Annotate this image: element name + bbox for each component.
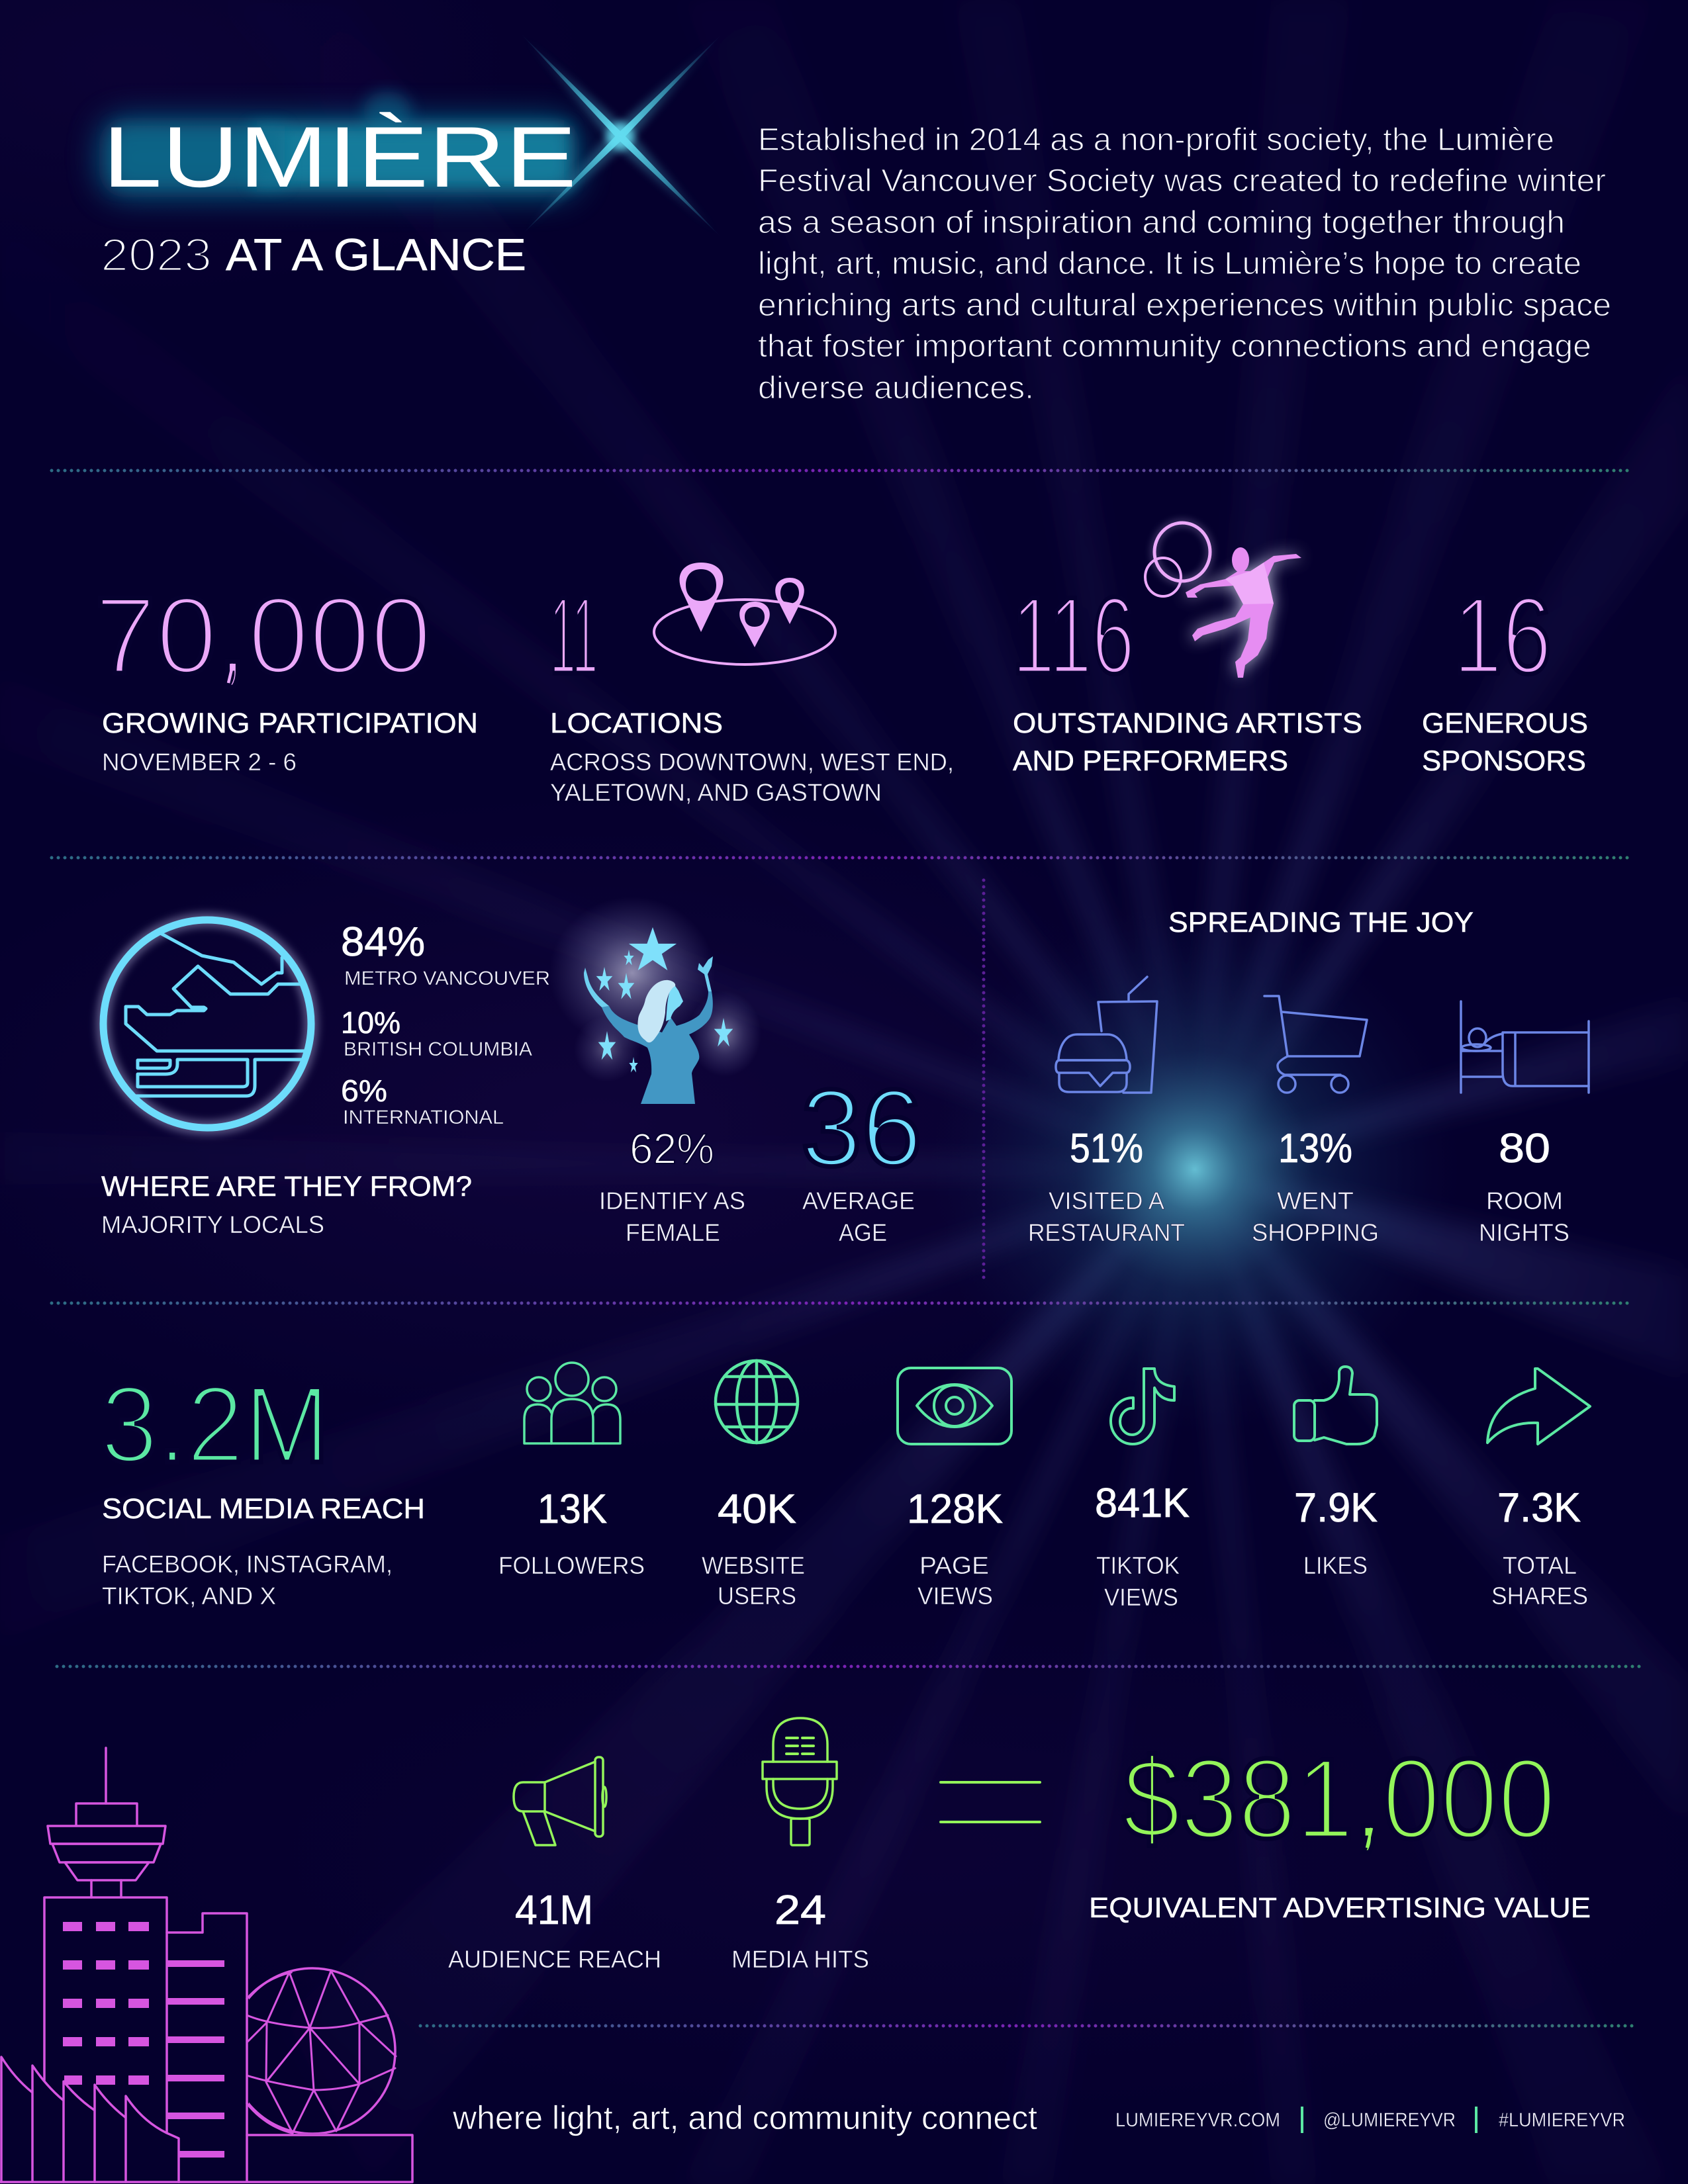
- stat: likes: 7.9K: [1294, 1485, 1378, 1531]
- stat: followers: [498, 1486, 645, 1579]
- stat: page views: VIEWS: [917, 1582, 993, 1610]
- stat: media hits: [731, 1888, 869, 1973]
- breakdown: 6%: INTERNATIONAL: [343, 1107, 504, 1128]
- logo glow: [99, 91, 579, 197]
- stat: 70,000 participation: [95, 574, 478, 776]
- stat: 36 average age: AGE: [839, 1219, 887, 1246]
- stat: 16 sponsors: 16: [1453, 574, 1552, 696]
- icon: eye: [898, 1368, 1011, 1444]
- logo wordmark: LUMIÈRE: [103, 109, 577, 205]
- stat: advertising value: $381,000: [1123, 1735, 1556, 1862]
- stat: 70,000 participation: GROWING PARTICIPATION: [102, 707, 478, 739]
- stat: restaurant: VISITED A: [1049, 1187, 1164, 1214]
- stat: room nights: NIGHTS: [1479, 1219, 1570, 1246]
- breakdown: 10%: [341, 1005, 532, 1060]
- panel: header: [99, 31, 1611, 406]
- stat: restaurant: 51%: [1070, 1126, 1143, 1171]
- stat: 3.2M social reach: 3.2M: [101, 1363, 330, 1485]
- stat: 116 artists: OUTSTANDING ARTISTS: [1013, 707, 1362, 739]
- stat: website users: 40K: [718, 1486, 796, 1532]
- subtitle: 2023: [101, 229, 212, 281]
- stat: page views: 128K: [907, 1486, 1003, 1532]
- stat: website users: USERS: [718, 1582, 796, 1610]
- subtitle: AT A GLANCE: [226, 230, 526, 280]
- icon: shopping cart: [1264, 996, 1367, 1093]
- stat: shopping: [1252, 1126, 1379, 1246]
- stat: 3.2M social reach: FACEBOOK, INSTAGRAM,: [102, 1551, 393, 1578]
- stat: total shares: TOTAL: [1503, 1552, 1577, 1579]
- panel: spreading the joy: [1028, 907, 1589, 1246]
- stat: 116 artists: [1012, 574, 1362, 777]
- stat: 3.2M social reach: SOCIAL MEDIA REACH: [102, 1493, 425, 1525]
- stat: total shares: 7.3K: [1497, 1485, 1581, 1531]
- stat: media hits: 24: [774, 1888, 826, 1933]
- stat: restaurant: [1028, 1126, 1185, 1246]
- icon: map pins: [654, 563, 835, 664]
- social handle: @LUMIEREYVR: [1323, 2109, 1456, 2131]
- intro paragraph: that foster important community connections and engage: [758, 329, 1591, 364]
- stat: likes: [1294, 1485, 1378, 1579]
- stat: TikTok views: [1095, 1480, 1190, 1611]
- stat: page views: PAGE: [919, 1552, 989, 1579]
- stat: TikTok views: 841K: [1095, 1480, 1190, 1526]
- icon: logo star flare: [518, 31, 725, 238]
- breakdown: 10%: BRITISH COLUMBIA: [344, 1038, 532, 1060]
- intro paragraph: diverse audiences.: [758, 371, 1034, 406]
- stat: restaurant: RESTAURANT: [1028, 1219, 1185, 1246]
- stat: 36 average age: AVERAGE: [802, 1187, 915, 1214]
- breakdown: 84%: [341, 919, 550, 989]
- stat: advertising value: EQUIVALENT ADVERTISING VALUE: [1089, 1892, 1591, 1924]
- icon: equals sign: [941, 1782, 1040, 1822]
- stat: website users: WEBSITE: [702, 1552, 805, 1579]
- stat: room nights: [1479, 1126, 1570, 1246]
- icon: megaphone: [514, 1757, 606, 1845]
- website: LUMIEREYVR.COM: [1115, 2109, 1280, 2131]
- stat: 16 sponsors: [1422, 574, 1588, 777]
- stat: audience reach: AUDIENCE REACH: [448, 1946, 661, 1973]
- icon: TikTok: [1111, 1369, 1174, 1444]
- stat: media hits: MEDIA HITS: [731, 1946, 869, 1973]
- stat: shopping: WENT: [1277, 1187, 1354, 1214]
- icon: dancer with hoops: [1145, 523, 1301, 678]
- stat: followers: 13K: [538, 1486, 607, 1532]
- stat: audience reach: [448, 1888, 661, 1973]
- breakdown: 84%: 84%: [341, 919, 425, 965]
- stat: 11 locations: ACROSS DOWNTOWN, WEST END,: [550, 749, 954, 776]
- stat: 62% female: FEMALE: [626, 1219, 720, 1246]
- stat: 11 locations: LOCATIONS: [550, 707, 723, 739]
- stat: 62% female: [599, 1124, 745, 1246]
- icon: microphone: [763, 1718, 837, 1845]
- icon: bed: [1461, 1001, 1589, 1093]
- stat: 62% female: 62%: [630, 1124, 714, 1173]
- intro paragraph: light, art, music, and dance. It is Lumière’s hope to create: [758, 246, 1581, 281]
- stat: 36 average age: [801, 1067, 922, 1246]
- stat: shopping: SHOPPING: [1252, 1219, 1379, 1246]
- breakdown: 6%: 6%: [341, 1073, 387, 1108]
- intro paragraph: Established in 2014 as a non-profit society, the Lumière: [758, 122, 1554, 158]
- stat: 70,000 participation: 70,000: [95, 574, 432, 696]
- stat: 3.2M social reach: [101, 1363, 425, 1610]
- stat: 3.2M social reach: TIKTOK, AND X: [102, 1582, 276, 1610]
- stat: room nights: 80: [1499, 1126, 1550, 1171]
- stat: 11 locations: [550, 574, 954, 806]
- stat: likes: LIKES: [1303, 1552, 1368, 1579]
- stat: room nights: ROOM: [1486, 1187, 1563, 1214]
- stat: 116 artists: AND PERFORMERS: [1013, 745, 1288, 777]
- stat: total shares: SHARES: [1491, 1582, 1588, 1610]
- panel: festival totals: [95, 523, 1588, 806]
- stat: TikTok views: TIKTOK: [1096, 1552, 1180, 1579]
- hashtag: #LUMIEREYVR: [1499, 2109, 1625, 2131]
- intro paragraph: [758, 122, 1611, 406]
- breakdown: 6%: [341, 1073, 504, 1128]
- icon: globe: [716, 1361, 798, 1443]
- illustration: Vancouver skyline: [0, 1748, 412, 2182]
- stat: 36 average age: 36: [801, 1067, 922, 1189]
- stat: 16 sponsors: SPONSORS: [1422, 745, 1586, 777]
- stat: 70,000 participation: NOVEMBER 2 - 6: [102, 749, 297, 776]
- icon: thumbs up: [1294, 1367, 1377, 1444]
- icon: Vancouver map circle: [103, 920, 311, 1128]
- subtitle: [101, 229, 526, 281]
- panel: footer: [452, 2099, 1625, 2136]
- stat: 116 artists: 116: [1012, 574, 1135, 696]
- stat: shopping: 13%: [1278, 1126, 1352, 1171]
- heading: WHERE ARE THEY FROM?: [101, 1171, 472, 1203]
- panel: social media: [101, 1361, 1590, 1611]
- intro paragraph: enriching arts and cultural experiences within public space: [758, 288, 1611, 323]
- panel: media value: [448, 1718, 1591, 1973]
- stat: page views: [907, 1486, 1003, 1610]
- subheading: MAJORITY LOCALS: [101, 1211, 324, 1238]
- icon: woman reaching for stars: [549, 897, 761, 1104]
- stat: followers: FOLLOWERS: [498, 1552, 645, 1579]
- heading: SPREADING THE JOY: [1168, 907, 1474, 938]
- intro paragraph: Festival Vancouver Society was created to redefine winter: [758, 163, 1606, 199]
- intro paragraph: as a season of inspiration and coming together through: [758, 205, 1565, 240]
- stat: audience reach: 41M: [515, 1888, 593, 1933]
- stat: 11 locations: YALETOWN, AND GASTOWN: [550, 779, 882, 806]
- panel: demographics: [549, 897, 922, 1246]
- stat: TikTok views: VIEWS: [1104, 1584, 1178, 1611]
- stat: 11 locations: 11: [550, 574, 598, 696]
- stat: advertising value: [1089, 1735, 1591, 1924]
- breakdown: 10%: 10%: [341, 1005, 400, 1040]
- icon: share arrow: [1487, 1369, 1590, 1444]
- panel: where are they from: [101, 919, 550, 1238]
- stat: 62% female: IDENTIFY AS: [599, 1187, 745, 1214]
- tagline: where light, art, and community connect: [452, 2099, 1037, 2136]
- breakdown: 84%: METRO VANCOUVER: [344, 968, 550, 989]
- stat: website users: [702, 1486, 805, 1610]
- icon: followers: [524, 1363, 620, 1443]
- stat: 16 sponsors: GENEROUS: [1422, 707, 1588, 739]
- stat: total shares: [1491, 1485, 1588, 1610]
- icon: burger and drink: [1056, 977, 1157, 1093]
